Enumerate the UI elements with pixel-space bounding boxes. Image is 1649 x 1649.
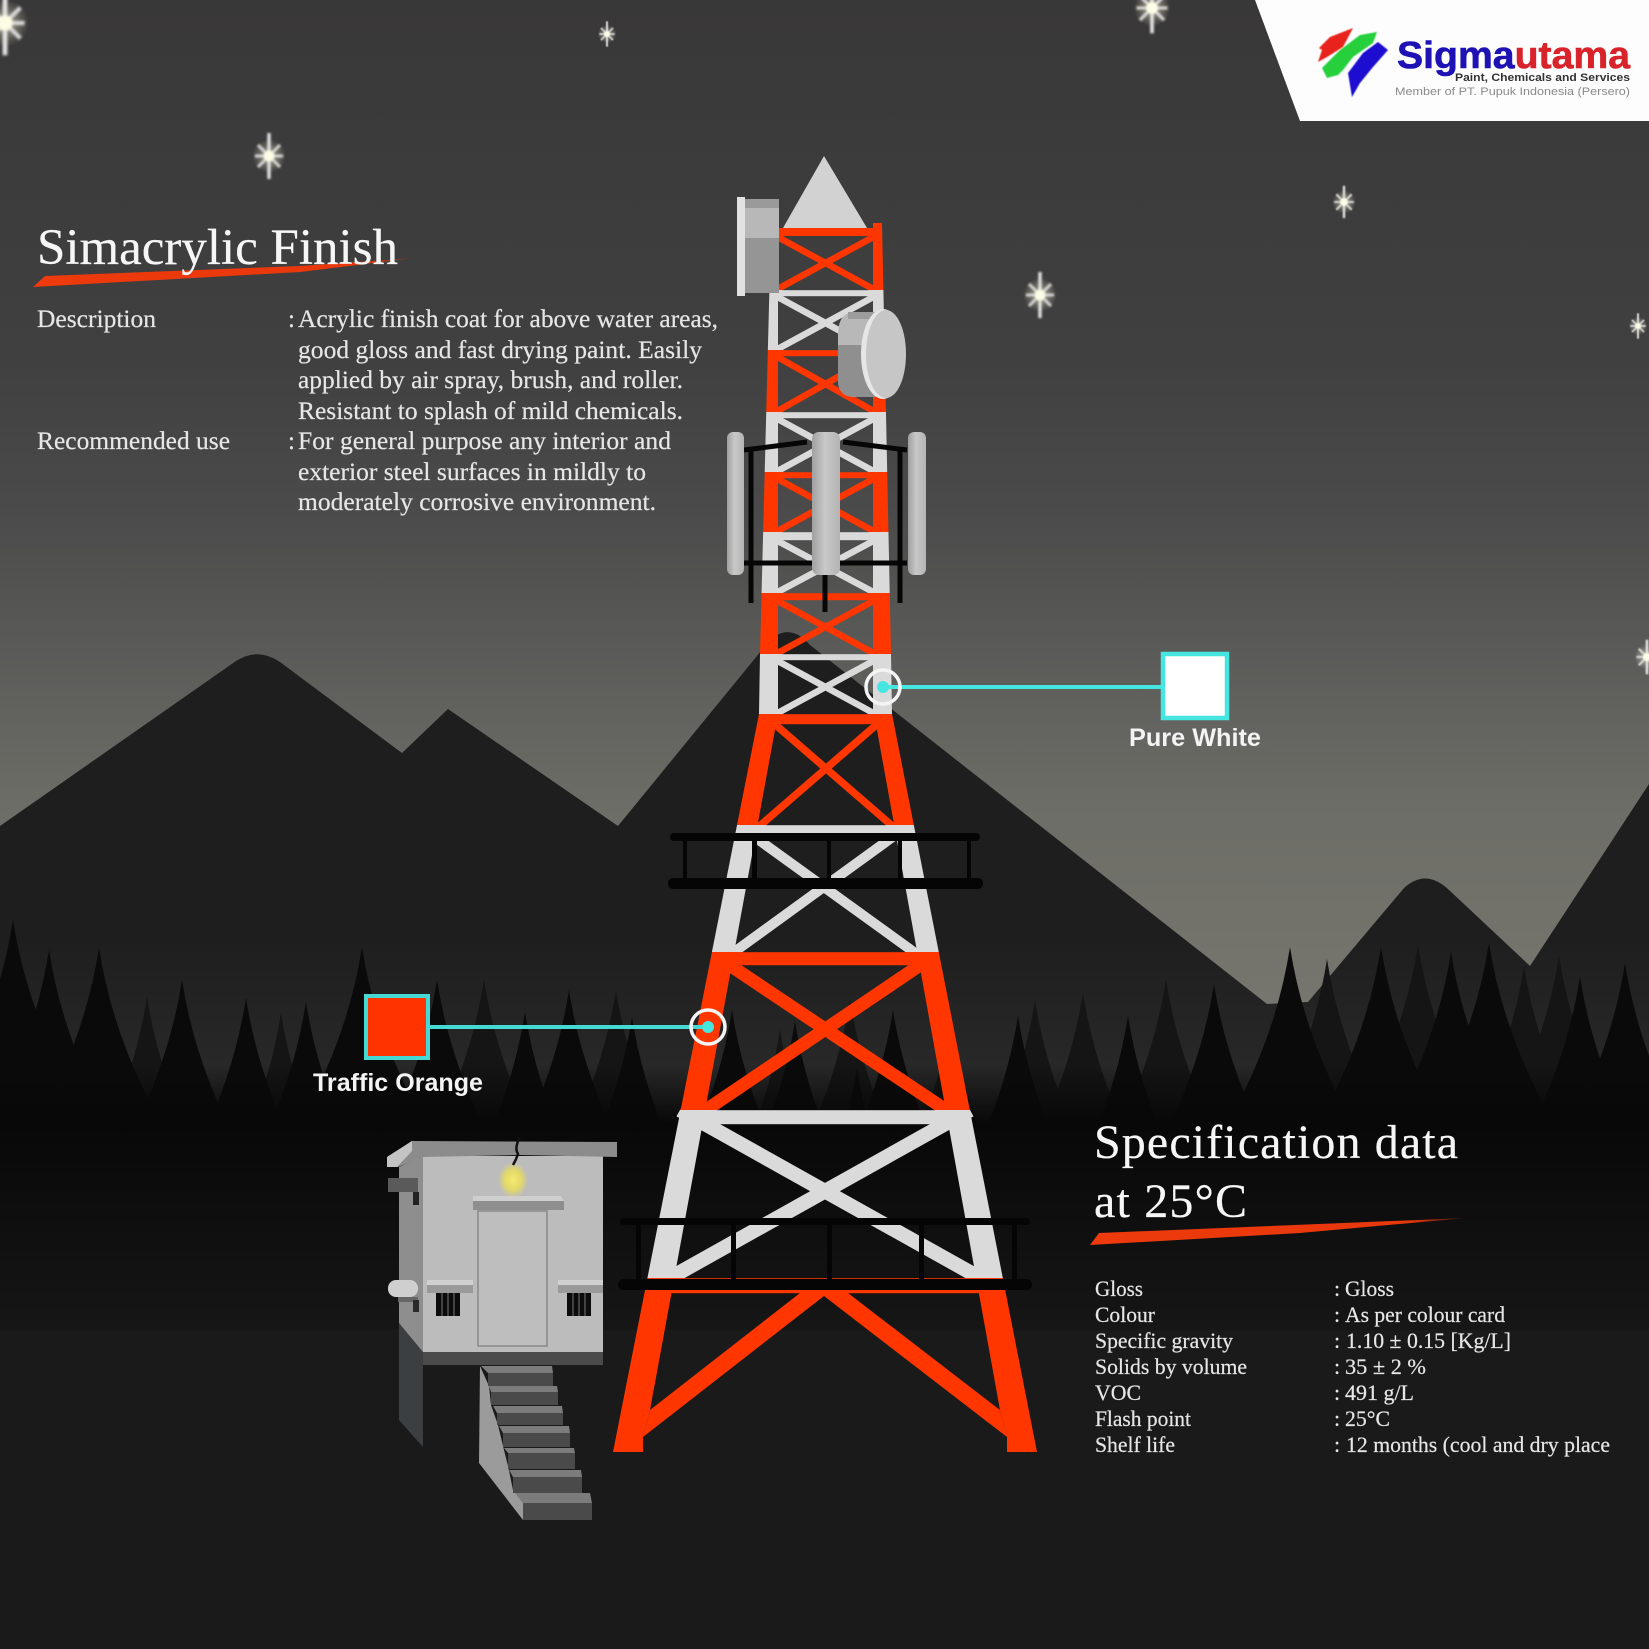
logo tagline: Paint, Chemicals and Services bbox=[1455, 72, 1630, 84]
legs bbox=[613, 223, 1037, 1452]
specification table: : bbox=[1334, 1406, 1340, 1431]
specification table bbox=[1095, 1276, 1610, 1457]
base strip bbox=[423, 1352, 603, 1365]
horizontal bars bbox=[660, 228, 990, 1293]
logo member line: Member of PT. Pupuk Indonesia (Persero) bbox=[1395, 86, 1630, 98]
antenna frame rods bbox=[744, 442, 907, 612]
tower with legs, bars and braces bbox=[613, 156, 1037, 1452]
description text block: exterior steel surfaces in mildly to bbox=[298, 459, 646, 486]
lamp bbox=[498, 1162, 528, 1198]
logo brush mark bbox=[1318, 28, 1388, 97]
upper platform bbox=[668, 833, 983, 889]
description text block: Recommended use bbox=[37, 428, 230, 455]
specification table: Gloss bbox=[1345, 1276, 1394, 1301]
cross braces bbox=[668, 235, 982, 1279]
description text block: : bbox=[288, 306, 295, 333]
specification table: : bbox=[1334, 1328, 1340, 1353]
window ledges and vents bbox=[427, 1280, 473, 1285]
specification table: : bbox=[1334, 1380, 1340, 1405]
description text block: Acrylic finish coat for above water areas, bbox=[298, 306, 718, 333]
callout: Traffic Orange bbox=[313, 996, 725, 1097]
specification table: VOC bbox=[1095, 1380, 1141, 1405]
specification table: : bbox=[1334, 1354, 1340, 1379]
lower platform bbox=[618, 1218, 1032, 1290]
logo wordmark: Sigmautama bbox=[1397, 35, 1631, 77]
heading: Specification data at 25°C: at 25°C bbox=[1094, 1175, 1247, 1228]
specification table: 25°C bbox=[1345, 1406, 1390, 1431]
specification table: : bbox=[1334, 1276, 1340, 1301]
callout: Traffic Orange: Traffic Orange bbox=[313, 1069, 483, 1097]
roof bbox=[387, 1141, 617, 1167]
stars bbox=[0, 0, 1649, 674]
forest: front trees bbox=[0, 920, 1649, 1469]
specification table: 35 ± 2 % bbox=[1345, 1354, 1426, 1379]
description text block: good gloss and fast drying paint. Easily bbox=[298, 337, 703, 364]
description text block: Resistant to splash of mild chemicals. bbox=[298, 398, 683, 425]
forest: back trees bbox=[85, 945, 1621, 1430]
building bbox=[387, 1137, 617, 1520]
ladder platforms bbox=[618, 833, 1032, 1290]
specification table: : bbox=[1334, 1432, 1340, 1457]
ground bbox=[0, 1065, 1649, 1649]
antenna: sector panels bbox=[727, 432, 926, 575]
front wall bbox=[423, 1156, 603, 1352]
specification table: Gloss bbox=[1095, 1276, 1143, 1301]
logo panel bbox=[1255, 0, 1649, 121]
heading: Specification data at 25°C bbox=[1090, 1116, 1466, 1245]
description text block: applied by air spray, brush, and roller. bbox=[298, 367, 683, 394]
description text block: : bbox=[288, 428, 295, 455]
callout: Pure White: Pure White bbox=[1129, 724, 1261, 752]
specification table: Colour bbox=[1095, 1302, 1156, 1327]
specification table: 12 months (cool and dry place bbox=[1346, 1432, 1610, 1457]
side base bbox=[399, 1323, 423, 1447]
specification table: 491 g/L bbox=[1345, 1380, 1414, 1405]
mountains bbox=[0, 632, 1649, 1300]
description text block bbox=[37, 306, 718, 516]
specification table: Specific gravity bbox=[1095, 1328, 1233, 1353]
description text block: For general purpose any interior and bbox=[298, 428, 672, 455]
specification table: Solids by volume bbox=[1095, 1354, 1247, 1379]
specification table: 1.10 ± 0.15 [Kg/L] bbox=[1346, 1328, 1511, 1353]
description text block: Description bbox=[37, 306, 157, 333]
heading: Specification data at 25°C: Specification data bbox=[1094, 1116, 1458, 1169]
specification table: Shelf life bbox=[1095, 1432, 1175, 1457]
callout: Pure White bbox=[866, 654, 1261, 752]
description text block: moderately corrosive environment. bbox=[298, 489, 656, 516]
lower flared braces bbox=[643, 1293, 1007, 1437]
antenna: top-left panel bbox=[737, 197, 779, 296]
specification table: As per colour card bbox=[1345, 1302, 1505, 1327]
specification table: Flash point bbox=[1095, 1406, 1191, 1431]
specification table: : bbox=[1334, 1302, 1340, 1327]
heading: Simacrylic Finish: Simacrylic Finish bbox=[37, 220, 398, 276]
side fittings bbox=[388, 1178, 418, 1192]
side wall bbox=[399, 1156, 423, 1352]
tip triangle bbox=[783, 156, 867, 228]
door bbox=[478, 1211, 547, 1346]
stairs bbox=[479, 1366, 592, 1520]
antenna: dish bbox=[838, 309, 906, 399]
